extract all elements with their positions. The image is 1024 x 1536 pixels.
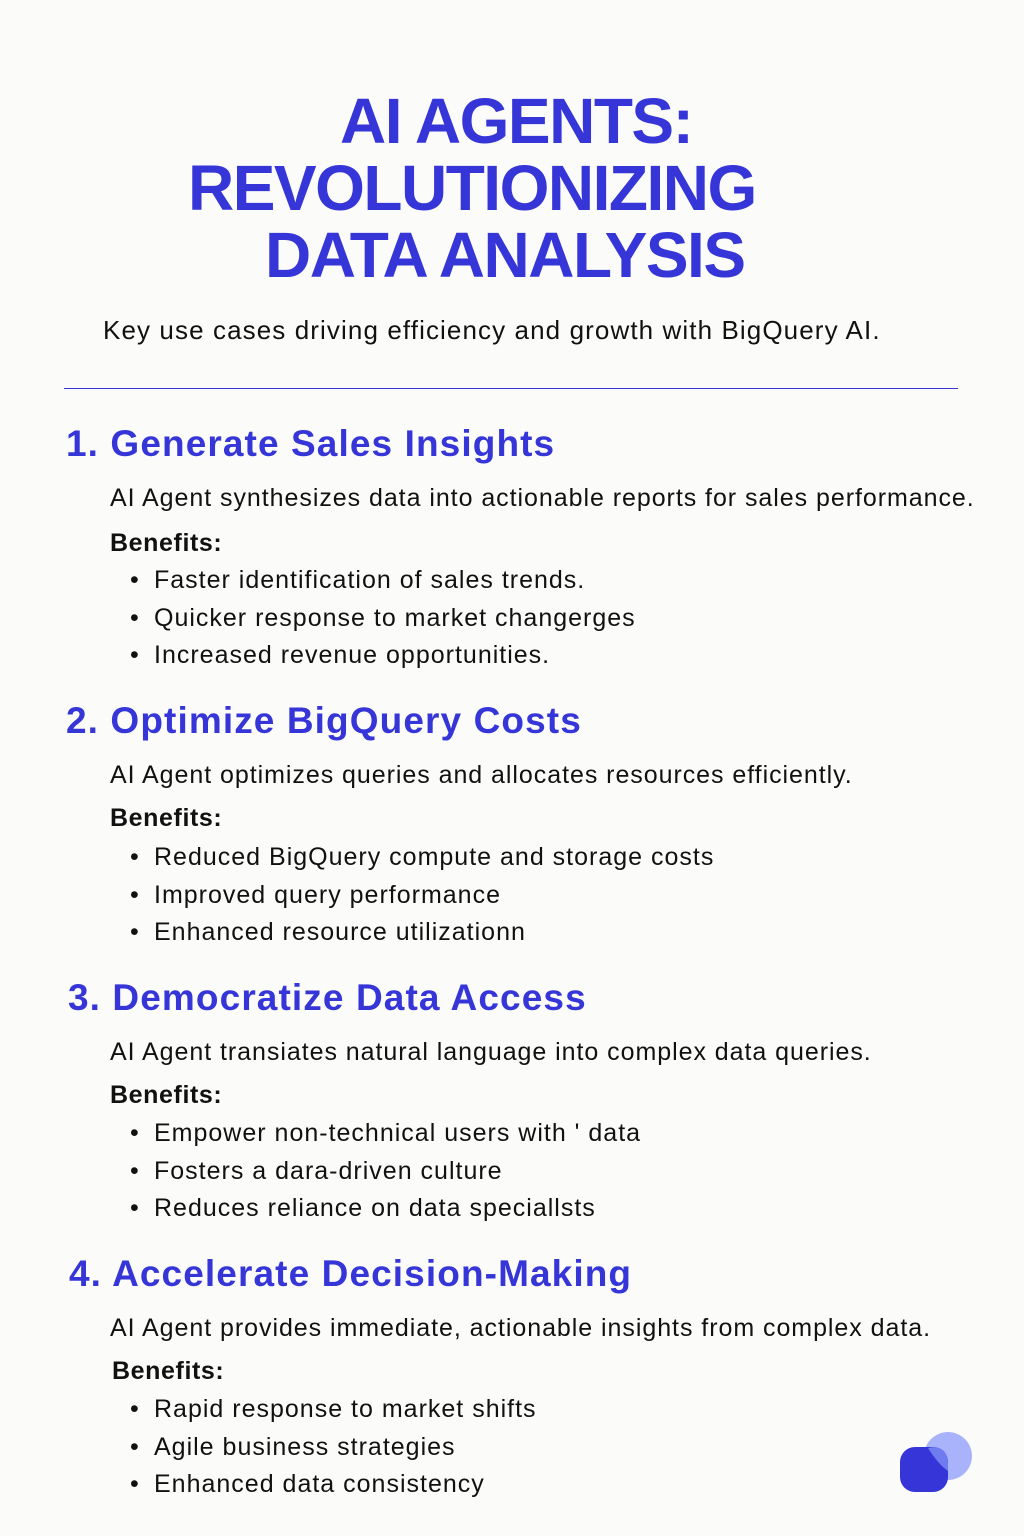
benefits 2: Benefits:	[110, 804, 222, 832]
title: REVOLUTIONIZING	[188, 152, 756, 224]
benefits 1: Benefits:	[110, 529, 222, 557]
bullets 3: Empower non-technical users with ' data	[154, 1119, 641, 1147]
heading 1: 1. Generate Sales Insights	[66, 423, 555, 464]
icon: logo	[900, 1432, 972, 1492]
bullets 1: •	[130, 566, 139, 594]
bullets 1: Increased revenue opportunities.	[154, 641, 550, 669]
bullets 3: •	[130, 1119, 139, 1147]
subtitle: Key use cases driving efficiency and growth with BigQuery AI.	[103, 315, 881, 345]
bullets 4: Enhanced data consistency	[154, 1470, 485, 1498]
bullets 2: Enhanced resource utilizationn	[154, 918, 526, 946]
bullets 4: •	[130, 1432, 139, 1460]
bullets 4: •	[130, 1395, 139, 1423]
title: AI AGENTS:	[340, 85, 692, 157]
description 3: AI Agent transiates natural language into complex data queries.	[110, 1038, 872, 1066]
title	[188, 85, 756, 291]
bullets 3: Fosters a dara-driven culture	[154, 1156, 503, 1184]
bullets 4: Rapid response to market shifts	[154, 1395, 537, 1423]
heading 2: 2. Optimize BigQuery Costs	[66, 700, 582, 741]
bullets 2: •	[130, 843, 139, 871]
heading 4: 4. Accelerate Decision-Making	[69, 1253, 632, 1294]
bullets 2: •	[130, 880, 139, 908]
bullets 3	[130, 1119, 641, 1222]
heading 3: 3. Democratize Data Access	[68, 977, 587, 1018]
bullets 2: Improved query performance	[154, 880, 501, 908]
bullets 3: Reduces reliance on data speciallsts	[154, 1194, 596, 1222]
section 4	[69, 1253, 931, 1498]
title: DATA ANALYSIS	[265, 219, 744, 291]
section 3	[68, 977, 872, 1222]
bullets 1	[130, 566, 636, 669]
bullets 2	[130, 843, 714, 946]
bullets 4	[130, 1395, 537, 1498]
bullets 2: •	[130, 918, 139, 946]
bullets 1: •	[130, 641, 139, 669]
benefits 4: Benefits:	[112, 1357, 224, 1385]
bullets 1: Quicker response to market changerges	[154, 604, 636, 632]
bullets 2: Reduced BigQuery compute and storage costs	[154, 843, 714, 871]
description 2: AI Agent optimizes queries and allocates resources efficiently.	[110, 761, 853, 789]
bullets 4: •	[130, 1470, 139, 1498]
description 1: AI Agent synthesizes data into actionable reports for sales performance.	[110, 484, 975, 512]
description 4: AI Agent provides immediate, actionable insights from complex data.	[110, 1314, 931, 1342]
bullets 1: •	[130, 604, 139, 632]
bullets 1: Faster identification of sales trends.	[154, 566, 585, 594]
bullets 3: •	[130, 1194, 139, 1222]
benefits 3: Benefits:	[110, 1081, 222, 1109]
bullets 3: •	[130, 1156, 139, 1184]
section 2	[66, 700, 853, 946]
bullets 4: Agile business strategies	[154, 1432, 456, 1460]
section 1	[66, 423, 975, 669]
